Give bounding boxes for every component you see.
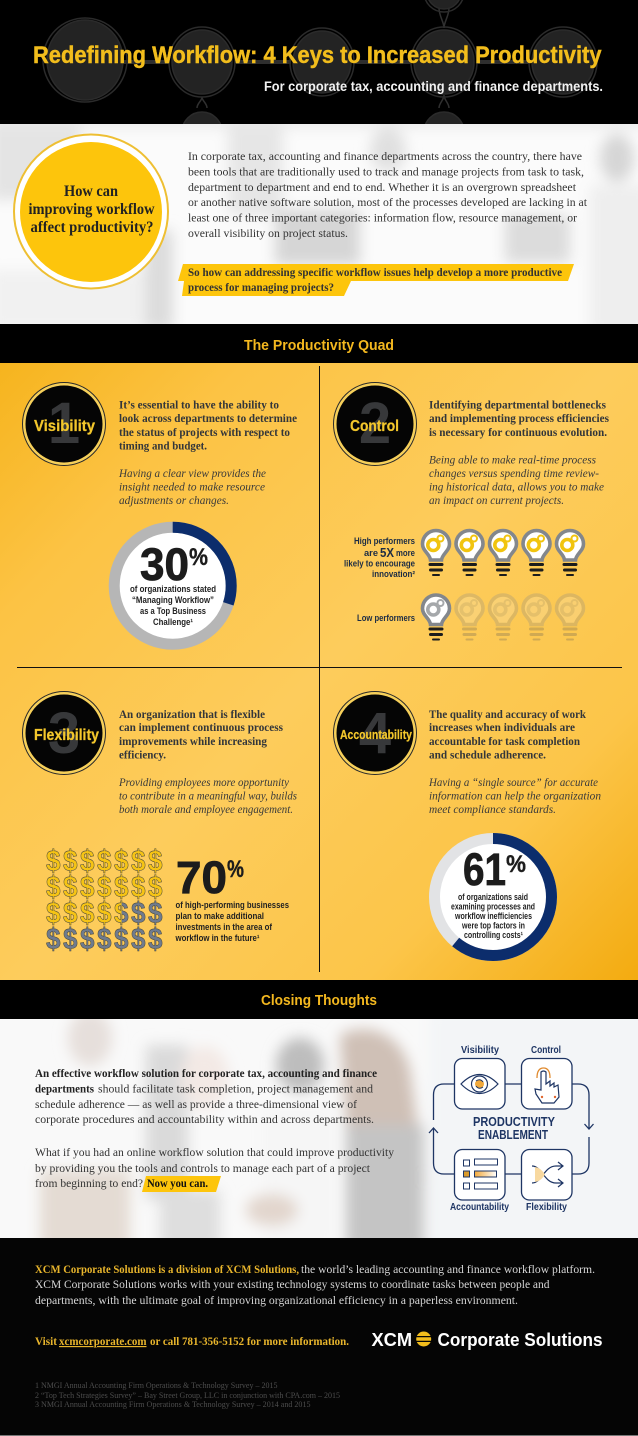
pictogram: dollar signs 70%: $: [97, 923, 112, 956]
pictogram: dollar signs 70%: $: [80, 923, 95, 956]
text: visibility: It’s essential to have the ability to: [119, 398, 279, 412]
text: visibility: look across departments to determine: [119, 412, 297, 425]
donut chart: 30%: as a Top Business: [140, 606, 206, 616]
text: visibility: Having a clear view provides the: [118, 467, 266, 480]
pictogram: dollar signs 70%: $: [114, 871, 129, 904]
text: accountability: The quality and accuracy of work: [429, 708, 587, 721]
text: flexibility: An organization that is flexible: [119, 708, 265, 721]
donut chart: 61%: 61: [463, 844, 506, 895]
text: control: ing historical data, allows you to make: [429, 480, 604, 494]
pictogram: dollar signs 70%: $: [114, 923, 129, 956]
question circle: affect productivity?: [30, 219, 154, 236]
footer: [0, 1238, 638, 1436]
company description: departments, with the ultimate goal of improving organizational efficiency in a paperless environment.: [35, 1294, 518, 1307]
closing text: from beginning to end?: [35, 1177, 143, 1190]
pictogram: high performers: 5X: [380, 545, 394, 560]
donut chart: 61%: workflow inefficiencies: [454, 911, 532, 921]
badge: flexibility: [22, 692, 106, 774]
question circle: improving workflow: [28, 201, 155, 218]
text: accountability: meet compliance standards.: [429, 803, 556, 816]
diagram labels: Accountability: [450, 1202, 509, 1213]
text: flexibility: improvements while increasing: [119, 735, 267, 748]
pictogram: dollar signs 70%: $: [131, 897, 146, 930]
callout question: [178, 264, 574, 296]
badge: flexibility: 3: [48, 701, 80, 766]
pictogram: dollar signs 70%: $: [46, 845, 61, 878]
closing text: departments: [35, 1082, 94, 1096]
panel: flexibility: [22, 692, 297, 956]
pictogram: dollar signs 70%: $: [46, 897, 61, 930]
pictogram: dollar signs 70%: $: [46, 871, 61, 904]
logo: XCM Corporate Solutions: Corporate Solutions: [438, 1330, 602, 1350]
icon: visibility eye: [454, 1058, 505, 1109]
diagram labels: ENABLEMENT: [478, 1128, 548, 1142]
intro paragraph: In corporate tax, accounting and finance departments across the country, there have: [188, 150, 582, 163]
pictogram: dollar signs 70%: $: [97, 871, 112, 904]
text: flexibility: to contribute in a meaningful way, builds: [119, 790, 297, 802]
pictogram: high performers: likely to encourage: [344, 558, 415, 568]
subtitle: For corporate tax, accounting and finance departments.: [264, 79, 603, 94]
pictogram: dollar signs 70%: $: [97, 897, 112, 930]
footnotes: 1 NMGI Annual Accounting Firm Operations & Technology Survey – 2015: [35, 1381, 278, 1390]
statistic: 70%: workflow in the future¹: [175, 933, 260, 943]
text: accountability: [428, 708, 601, 816]
text: accountability: increases when individuals are: [429, 721, 575, 734]
donut chart: 30%: “Managing Workflow”: [132, 595, 214, 605]
intro paragraph: or another native software solution, most of the processes developed are lacking in at: [188, 196, 588, 209]
badge: accountability: [334, 692, 416, 774]
pictogram: dollar signs 70%: $: [148, 897, 163, 930]
header banner: [33, 0, 603, 152]
intro paragraph: overall visibility on project status.: [188, 227, 348, 240]
badge: visibility: [22, 382, 106, 466]
closing text: schedule adherence — as well as provide a three-dimensional view of: [35, 1098, 357, 1111]
text: accountability: information can help the organization: [429, 790, 601, 802]
faded office photo: [0, 115, 638, 335]
pictogram: dollar signs 70%: $: [131, 845, 146, 878]
text: flexibility: can implement continuous process: [119, 721, 283, 734]
text: visibility: adjustments or changes.: [119, 494, 229, 507]
donut chart: 30%: Challenge¹: [153, 617, 193, 627]
donut chart: 61%: were top factors in: [461, 920, 525, 930]
badge: control: 2: [359, 391, 391, 456]
call to action: or call 781-356-5152 for more information.: [150, 1335, 349, 1348]
logo: XCM Corporate Solutions: [372, 1330, 602, 1350]
diagram labels: Flexibility: [526, 1202, 567, 1213]
company description: XCM Corporate Solutions is a division of XCM Solutions,: [35, 1263, 299, 1276]
donut chart: 61%: [434, 838, 552, 956]
pictogram: dollar signs 70%: $: [148, 923, 163, 956]
statistic: 70%: %: [227, 856, 244, 883]
donut chart: 30%: [114, 527, 231, 644]
logo: XCM Corporate Solutions: XCM: [372, 1330, 412, 1350]
pictogram: dollar signs 70%: [46, 845, 163, 956]
footnotes: 3 NMGI Annual Accounting Firm Operations & Technology Survey – 2014 and 2015: [35, 1400, 310, 1409]
pictogram: dollar signs 70%: $: [80, 897, 95, 930]
pictogram: dollar signs 70%: $: [148, 871, 163, 904]
statistic: 70%: of high-performing businesses: [176, 900, 289, 910]
text: visibility: [118, 398, 297, 507]
pictogram: high performers: [344, 530, 584, 579]
text: visibility: the status of projects with respect to: [119, 426, 290, 439]
pictogram: dollar signs 70%: $: [148, 845, 163, 878]
closing text: What if you had an online workflow solution that could improve productivity: [35, 1146, 394, 1159]
diagram labels: PRODUCTIVITY: [473, 1115, 556, 1129]
pictogram: dollar signs 70%: $: [131, 923, 146, 956]
pictogram: dollar signs 70%: $: [80, 871, 95, 904]
donut chart: 30%: %: [189, 544, 208, 571]
cycle arrows: [429, 1084, 594, 1174]
text: visibility: insight needed to make resource: [119, 480, 265, 494]
badge: control: Control: [350, 418, 399, 435]
pictogram: dollar signs 70%: $: [63, 871, 78, 904]
diagram labels: Visibility: [461, 1045, 499, 1056]
closing text: should facilitate task completion, project management and: [98, 1082, 373, 1096]
closing text: An effective workflow solution for corporate tax, accounting and finance: [35, 1067, 377, 1080]
badge: flexibility: Flexibility: [34, 727, 99, 744]
badge: visibility: 1: [48, 391, 80, 456]
icon: control hand: [522, 1058, 572, 1109]
company description: [35, 1263, 595, 1307]
text: control: Being able to make real-time process: [429, 454, 596, 466]
statistic: 70%: investments in the area of: [176, 922, 273, 932]
donut chart: 61%: examining processes and: [451, 902, 535, 912]
question circle: [14, 134, 168, 288]
decorative node network: [43, 0, 597, 152]
panel: accountability: [334, 692, 601, 956]
callout question: process for managing projects?: [188, 281, 334, 294]
panel: introduction: [0, 115, 638, 335]
statistic: 70%: plan to make additional: [176, 911, 264, 921]
badge: visibility: Visibility: [34, 418, 95, 435]
text: control: an impact on current projects.: [429, 494, 564, 507]
statistic: 70%: 70: [176, 852, 227, 903]
text: control: Identifying departmental bottlenecks: [429, 398, 606, 412]
intro paragraph: [188, 150, 588, 240]
text: control: is necessary for continuous evolution.: [429, 426, 607, 439]
panel: control: [334, 382, 609, 640]
panel: quad background: [0, 363, 638, 980]
intro paragraph: least one of three important categories: information flow, resource management, or: [188, 212, 577, 224]
badge: accountability: Accountability: [340, 728, 412, 742]
pictogram: dollar signs 70%: $: [80, 845, 95, 878]
closing text: [35, 1067, 394, 1192]
footnotes: 2 “Top Tech Strategies Survey” – Bay Street Group, LLC in conjunction with CPA.com – 2015: [35, 1391, 340, 1400]
pictogram: high performers: innovation²: [372, 569, 415, 579]
closing text: Now you can.: [147, 1177, 208, 1190]
company description: the world’s leading accounting and finance workflow platform.: [301, 1263, 595, 1276]
company description: XCM Corporate Solutions works with your existing technology systems to coordinate tasks between people and: [35, 1278, 550, 1291]
text: control: [429, 398, 609, 507]
pictogram: dollar signs 70%: $: [114, 897, 129, 930]
pictogram: dollar signs 70%: $: [63, 845, 78, 878]
panel: closing thoughts: [0, 1010, 638, 1250]
icon: flexibility crossing arrows: [522, 1150, 572, 1200]
badge: accountability: 4: [359, 701, 391, 766]
statistic: 70%: [175, 852, 289, 943]
pictogram: low performers: [357, 595, 584, 640]
donut chart: 61%: %: [506, 851, 526, 878]
call to action: xcmcorporate.com: [59, 1335, 147, 1348]
closing text: by providing you the tools and controls to manage each part of a project: [35, 1162, 371, 1175]
text: control: and implementing process efficiencies: [429, 412, 609, 425]
diagram labels: [450, 1045, 567, 1213]
intro paragraph: department to department and end to end. Whether it is an overgrown spreadsheet: [188, 181, 577, 194]
donut chart: 30%: 30: [140, 539, 189, 590]
donut chart: 61%: controlling costs¹: [464, 930, 523, 940]
heading: Closing Thoughts: Closing Thoughts: [261, 993, 377, 1009]
pictogram: dollar signs 70%: $: [63, 897, 78, 930]
badge: control: [334, 382, 416, 466]
text: flexibility: Providing employees more opportunity: [118, 776, 290, 789]
call to action: [35, 1335, 349, 1348]
text: accountability: Having a “single source” for accurate: [428, 776, 598, 789]
question circle: How can: [64, 183, 118, 200]
call to action: Visit: [35, 1335, 57, 1348]
pictogram: dollar signs 70%: $: [114, 845, 129, 878]
donut chart: 61%: of organizations said: [458, 892, 528, 902]
pictogram: high performers: more: [396, 548, 415, 558]
footnotes: [35, 1381, 340, 1409]
intro paragraph: been tools that are traditionally used to track and manage projects from task to task,: [188, 166, 584, 178]
text: flexibility: [118, 708, 297, 816]
heading: The Productivity Quad: The Productivity Quad: [244, 338, 394, 354]
heading: Closing Thoughts: [0, 980, 638, 1019]
pictogram: high performers: High performers: [354, 536, 415, 546]
pictogram: dollar signs 70%: $: [97, 845, 112, 878]
panel: visibility: [22, 382, 297, 644]
text: accountability: and schedule adherence.: [429, 748, 546, 762]
donut chart: 30%: of organizations stated: [130, 584, 216, 594]
text: control: changes versus spending time review-: [429, 467, 599, 480]
faded meeting photo: [34, 1019, 434, 1238]
pictogram: high performers: are: [364, 548, 378, 558]
callout question: So how can addressing specific workflow issues help develop a more productive: [188, 266, 562, 279]
pictogram: low performers: Low performers: [357, 613, 415, 623]
text: flexibility: both morale and employee engagement.: [119, 803, 293, 816]
text: flexibility: efficiency.: [119, 748, 166, 762]
closing text: corporate procedures and accountability within and across departments.: [35, 1113, 374, 1126]
text: visibility: timing and budget.: [119, 440, 207, 452]
text: accountability: accountable for task completion: [429, 735, 581, 748]
icon: accountability checklist: [454, 1150, 505, 1200]
diagram labels: Control: [531, 1045, 561, 1056]
heading: The Productivity Quad: [0, 324, 638, 363]
diagram: productivity enablement: [429, 1045, 594, 1213]
pictogram: dollar signs 70%: $: [46, 923, 61, 956]
pictogram: dollar signs 70%: $: [63, 923, 78, 956]
pictogram: dollar signs 70%: $: [131, 871, 146, 904]
